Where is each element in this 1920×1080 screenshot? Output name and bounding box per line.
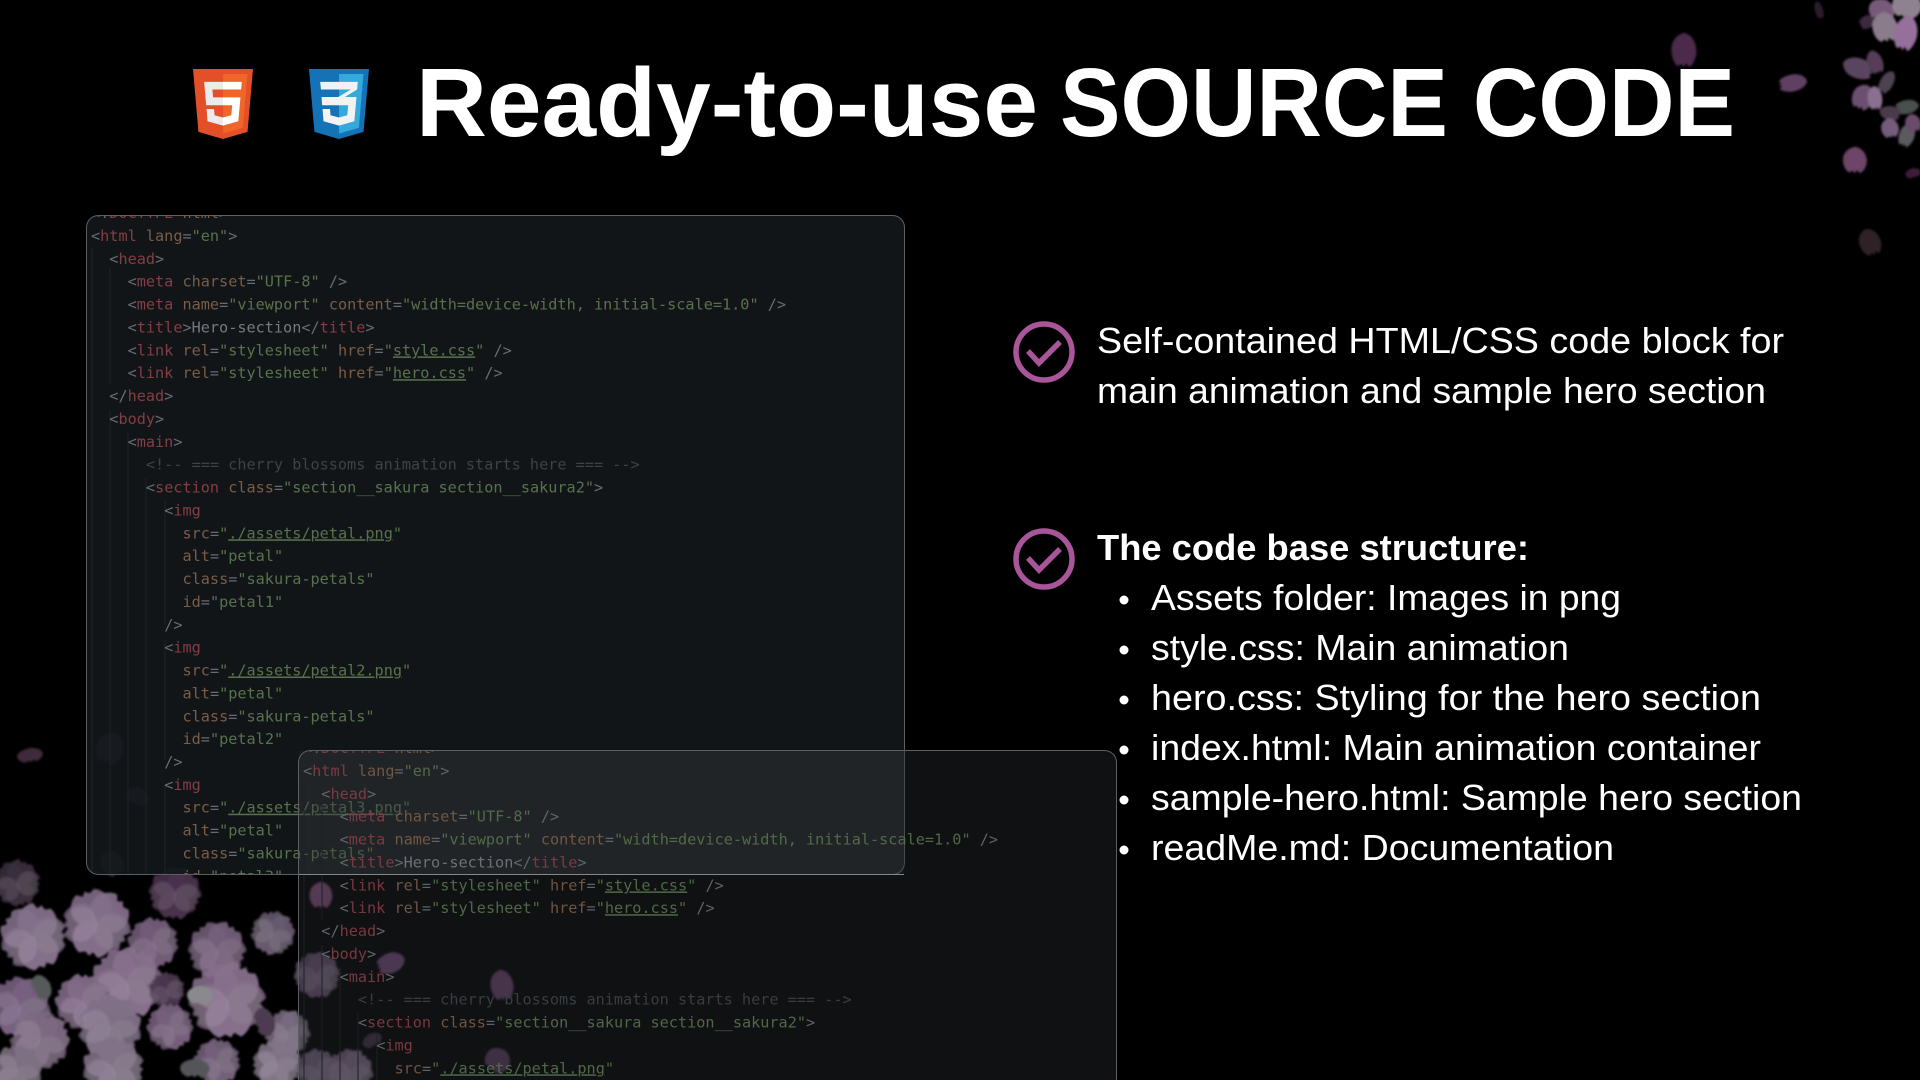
text block: self-contained description: Self-contained HTML/CSS code block for [1097, 320, 1784, 361]
icon: HTML5 shield [193, 69, 253, 139]
panel: code window 1: id="petal1" [182, 593, 283, 611]
panel: code window 2: <head> [321, 785, 376, 803]
text block: code base structure: The code base structure: [1097, 527, 1529, 568]
blossom cluster: bottom left [0, 728, 385, 1080]
panel: code window 1: <title>Hero-section</title> [128, 318, 375, 336]
title: Ready-to-use [416, 48, 1038, 157]
text block: code base structure: sample-hero.html: Sample hero section [1151, 777, 1802, 818]
panel: code window 2: <!-- === cherry blossoms animation starts here === --> [358, 991, 852, 1009]
panel: code window 1: src="./assets/petal2.png" [182, 662, 411, 680]
panel: code window 1: id="petal3" [182, 867, 283, 885]
icon: check circle 1 [1016, 324, 1072, 380]
panel: code window 1: /> [164, 753, 182, 771]
panel: code window 2: <img [376, 1036, 413, 1054]
text block: self-contained description: main animation and sample hero section [1097, 370, 1766, 411]
panel: code window 1: class="sakura-petals" [182, 707, 375, 725]
panel: code window 2: <html lang="en"> [303, 762, 449, 780]
panel: code window 1: /> [164, 616, 182, 634]
panel: code window 2: <link rel="stylesheet" href="hero.css" /> [340, 899, 715, 917]
panel: code window 1: </head> [109, 387, 173, 405]
panel: code window 1: <main> [128, 433, 182, 451]
text block: code base structure: readMe.md: Documentation [1151, 827, 1614, 868]
panel: code window 1: alt="petal" [182, 547, 283, 565]
panel: code window 1: id="petal2" [182, 730, 283, 748]
panel: code window 1: <!-- === cherry blossoms animation starts here === --> [146, 456, 640, 474]
panel: code window 2: <body> [321, 945, 376, 963]
text block: code base structure: index.html: Main animation container [1151, 727, 1761, 768]
icon: CSS3 shield [309, 69, 369, 139]
panel: code window 1: <meta charset="UTF-8" /> [128, 273, 347, 291]
panel: code window 1: <img [164, 501, 201, 519]
panel: code window 1: alt="petal" [182, 822, 283, 840]
panel: code window 1: class="sakura-petals" [182, 844, 375, 862]
icon: check circle 2 [1016, 531, 1072, 587]
panel: code window 1: <body> [109, 410, 164, 428]
scattered petals around code panel 2 [310, 882, 516, 1078]
panel: code window 2: <title>Hero-section</title> [340, 854, 587, 872]
panel: code window 2: <main> [340, 968, 394, 986]
panel: code window 1: <html lang="en"> [91, 227, 237, 245]
title [416, 48, 1735, 157]
panel: code window 1: <img [164, 639, 201, 657]
panel: code window 1: <meta name="viewport" content="width=device-width, initial-scale=1.0" /> [128, 296, 786, 314]
panel: code window 2: </head> [321, 922, 385, 940]
panel: code window 2: <meta charset="UTF-8" /> [340, 808, 559, 826]
panel: code window 1 [86, 204, 904, 885]
panel: code window 1: alt="petal" [182, 684, 283, 702]
panel: code window 2: <meta name="viewport" content="width=device-width, initial-scale=1.0" /> [340, 831, 998, 849]
blossom cluster: top right [1671, 0, 1920, 258]
panel: code window 2: <!DOCTYPE html> [303, 739, 440, 757]
panel: code window 2: <link rel="stylesheet" href="style.css" /> [340, 876, 724, 894]
panel: code window 2: src="./assets/petal.png" [394, 1059, 614, 1077]
panel: code window 1: <!DOCTYPE html> [91, 204, 228, 222]
panel: code window 2 [298, 739, 1116, 1080]
panel: code window 1: <head> [109, 250, 164, 268]
text block: code base structure [1097, 527, 1802, 868]
panel: code window 1: <img [164, 776, 201, 794]
panel: code window 1: src="./assets/petal.png" [182, 524, 402, 542]
text block: self-contained description [1097, 320, 1784, 411]
panel: code window 1: src="./assets/petal3.png" [182, 799, 411, 817]
panel: code window 1: <section class="section__sakura section__sakura2"> [146, 479, 603, 497]
text block: code base structure: hero.css: Styling for the hero section [1151, 677, 1761, 718]
title: SOURCE CODE [1060, 48, 1735, 157]
panel: code window 2: <section class="section__sakura section__sakura2"> [358, 1014, 815, 1032]
panel: code window 1: <link rel="stylesheet" href="hero.css" /> [128, 364, 503, 382]
panel: code window 1: class="sakura-petals" [182, 570, 375, 588]
text block: code base structure: Assets folder: Images in png [1151, 577, 1621, 618]
panel: code window 1: <link rel="stylesheet" href="style.css" /> [128, 341, 512, 359]
text block: code base structure: style.css: Main animation [1151, 627, 1569, 668]
